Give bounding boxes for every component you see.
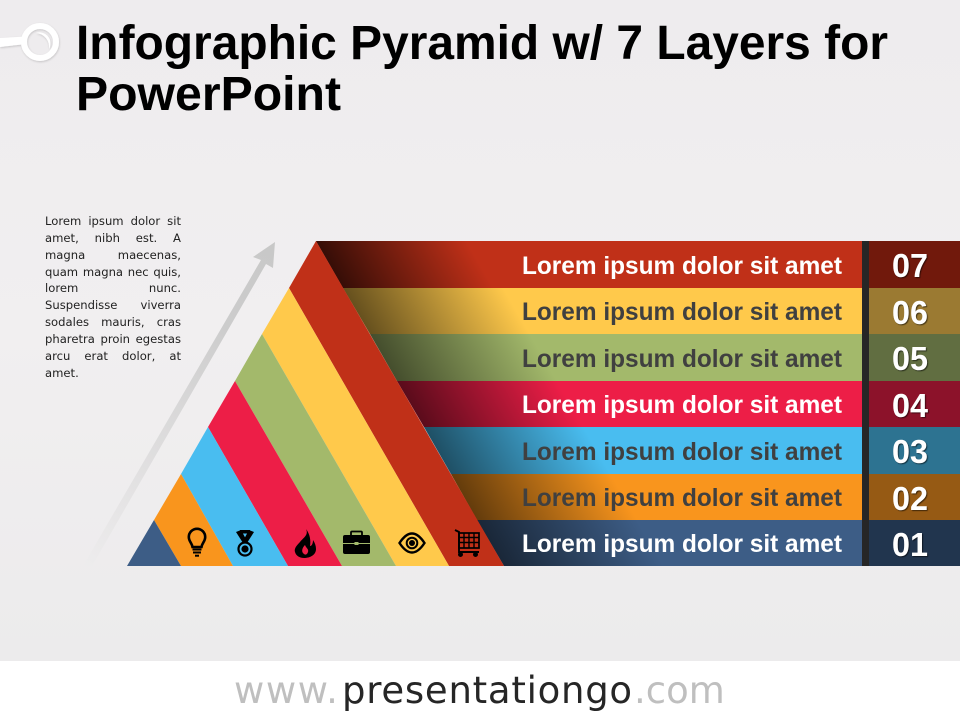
- text block: description: pharetra proin egestas: [45, 332, 181, 346]
- icon: light bulb: [189, 529, 205, 556]
- text block: description: amet.: [45, 366, 79, 380]
- bar 02: [451, 474, 960, 520]
- bar 03: 03: [892, 433, 928, 470]
- pyramid layer 04: [208, 381, 342, 566]
- bar 03: Lorem ipsum dolor sit amet: [522, 438, 843, 466]
- bar 05: [370, 334, 960, 381]
- bar 04: Lorem ipsum dolor sit amet: [522, 391, 843, 419]
- icon: medal: [236, 530, 254, 556]
- bar 06: Lorem ipsum dolor sit amet: [522, 298, 843, 326]
- icon: flame: [295, 529, 316, 558]
- title: Infographic Pyramid w/ 7 Layers for: [76, 17, 888, 70]
- bar 01: [477, 520, 960, 566]
- bar 01: Lorem ipsum dolor sit amet: [522, 530, 843, 558]
- bar 02: 02: [892, 480, 928, 517]
- text block: description: magna maecenas,: [45, 248, 181, 262]
- horizontal bars: [316, 241, 960, 566]
- footer band: [0, 661, 960, 720]
- footer url: www.: [234, 669, 340, 712]
- text block: description: [45, 214, 181, 380]
- title: PowerPoint: [76, 68, 341, 121]
- footer url: .com: [634, 669, 725, 712]
- text block: description: Suspendisse viverra: [45, 298, 181, 312]
- pyramid layer 03: [181, 427, 288, 566]
- icon: pin ring: [0, 26, 56, 58]
- pyramid layer 07: [289, 241, 504, 566]
- icon: eye: [400, 534, 424, 552]
- bar 07: [316, 241, 960, 288]
- bar 02: Lorem ipsum dolor sit amet: [522, 484, 843, 512]
- text block: description: sodales mauris, cras: [45, 315, 181, 329]
- bar 06: 06: [892, 294, 928, 331]
- icon: shopping cart: [455, 530, 479, 556]
- text block: description: lorem nunc.: [45, 281, 181, 295]
- text block: description: arcu erat dolor, at: [45, 349, 181, 363]
- arrow body: [83, 242, 275, 566]
- bar 05: Lorem ipsum dolor sit amet: [522, 345, 843, 373]
- icon: briefcase: [343, 532, 370, 554]
- pyramid layer 06: [262, 288, 449, 566]
- bar 07: Lorem ipsum dolor sit amet: [522, 252, 843, 280]
- pyramid layer 02: [154, 474, 233, 566]
- bar 01: 01: [892, 526, 928, 563]
- pyramid: [127, 241, 504, 566]
- bar 04: [397, 381, 960, 427]
- bar 06: [343, 288, 960, 334]
- bar 03: [424, 427, 960, 474]
- text block: description: amet, nibh est. A: [45, 231, 181, 245]
- text block: description: Lorem ipsum dolor sit: [45, 214, 181, 228]
- footer url: presentationgo: [342, 669, 633, 712]
- bar 07: 07: [892, 247, 928, 284]
- title: [76, 17, 888, 121]
- pyramid layer 05: [235, 334, 396, 566]
- pyramid layer 01: [127, 520, 181, 566]
- text block: description: quam magna nec quis,: [45, 265, 181, 279]
- bar 04: 04: [892, 387, 929, 424]
- bar 05: 05: [892, 340, 928, 377]
- vertical separator: [862, 241, 869, 566]
